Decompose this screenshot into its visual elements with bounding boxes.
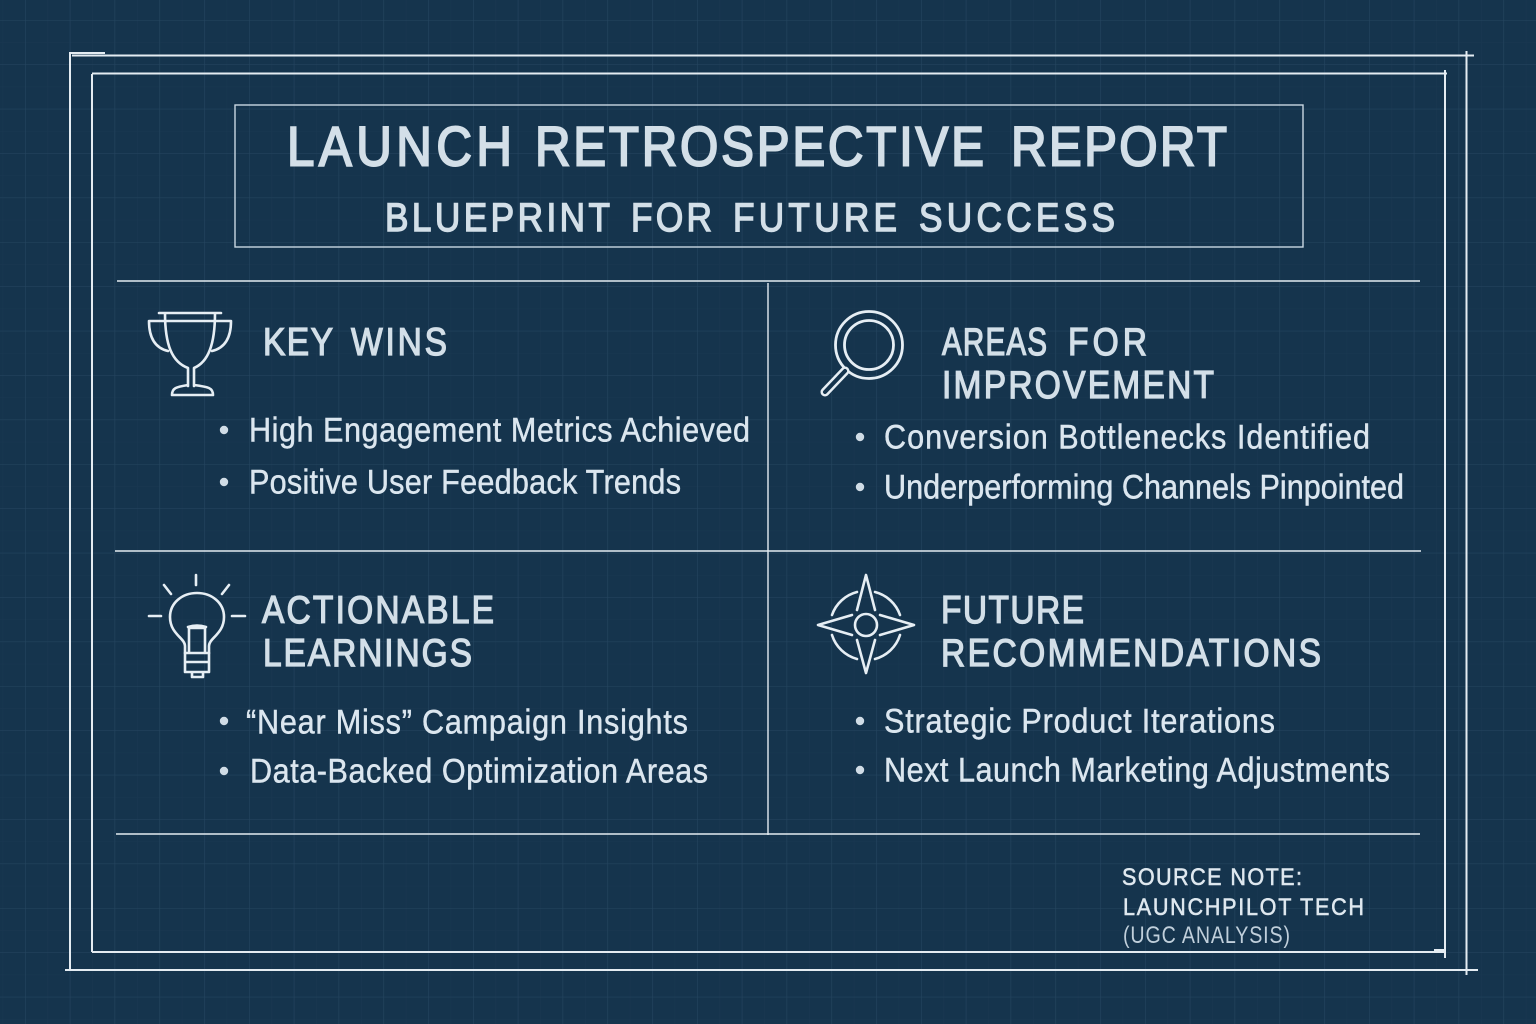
subtitle: BLUEPRINT <box>385 195 610 239</box>
subtitle <box>385 195 1115 239</box>
subtitle: FUTURE <box>733 195 897 239</box>
heading: future recommendations <box>941 588 1321 675</box>
heading: key wins: WINS <box>351 320 447 364</box>
panel dividers <box>115 281 1421 835</box>
icon: trophy <box>149 313 231 395</box>
bullet list: areas for improvement: Underperforming Channels Pinpointed <box>884 468 1404 506</box>
source note <box>1122 863 1364 948</box>
heading: key wins: KEY <box>263 320 333 364</box>
panel: areas for improvement <box>825 312 1404 506</box>
bullet list: future recommendations: Strategic Product Iterations <box>884 702 1275 740</box>
bullet list: actionable learnings <box>220 703 708 790</box>
title: LAUNCH <box>287 116 512 178</box>
source note: (UGC ANALYSIS) <box>1123 921 1290 948</box>
icon: compass star <box>818 575 914 673</box>
heading: key wins <box>263 320 447 364</box>
source note: SOURCE NOTE: <box>1122 863 1302 890</box>
inner frame <box>92 70 1447 958</box>
heading: actionable learnings: ACTIONABLE <box>262 588 494 632</box>
heading: actionable learnings <box>262 588 494 675</box>
subtitle: SUCCESS <box>919 195 1115 239</box>
bullet list: key wins: High Engagement Metrics Achieved <box>249 411 750 449</box>
bullet list: future recommendations <box>856 702 1390 789</box>
bullet list: areas for improvement <box>856 418 1404 506</box>
icon: light bulb <box>149 575 245 677</box>
heading: areas for improvement: AREAS <box>942 321 1047 364</box>
title: RETROSPECTIVE <box>535 116 984 178</box>
heading: future recommendations: RECOMMENDATIONS <box>941 631 1321 675</box>
bullet list: future recommendations: Next Launch Marketing Adjustments <box>884 751 1390 789</box>
heading: areas for improvement: IMPROVEMENT <box>942 363 1214 407</box>
bullet list: key wins <box>220 411 750 501</box>
heading: areas for improvement <box>942 320 1214 407</box>
heading: actionable learnings: LEARNINGS <box>263 631 472 675</box>
title <box>287 116 1227 178</box>
title block <box>235 105 1303 247</box>
subtitle: FOR <box>631 195 712 239</box>
heading: areas for improvement: FOR <box>1068 320 1147 364</box>
title: REPORT <box>1011 116 1227 178</box>
panel: future recommendations <box>818 575 1390 789</box>
panel: actionable learnings <box>149 575 708 790</box>
panel: key wins <box>149 313 750 501</box>
source note: LAUNCHPILOT TECH <box>1123 893 1364 920</box>
bullet list: actionable learnings: “Near Miss” Campaign Insights <box>246 703 688 741</box>
bullet list: key wins: Positive User Feedback Trends <box>249 463 681 501</box>
bullet list: actionable learnings: Data-Backed Optimization Areas <box>250 752 708 790</box>
bullet list: areas for improvement: Conversion Bottlenecks Identified <box>884 418 1370 456</box>
icon: magnifying glass <box>825 312 902 392</box>
heading: future recommendations: FUTURE <box>941 588 1084 632</box>
